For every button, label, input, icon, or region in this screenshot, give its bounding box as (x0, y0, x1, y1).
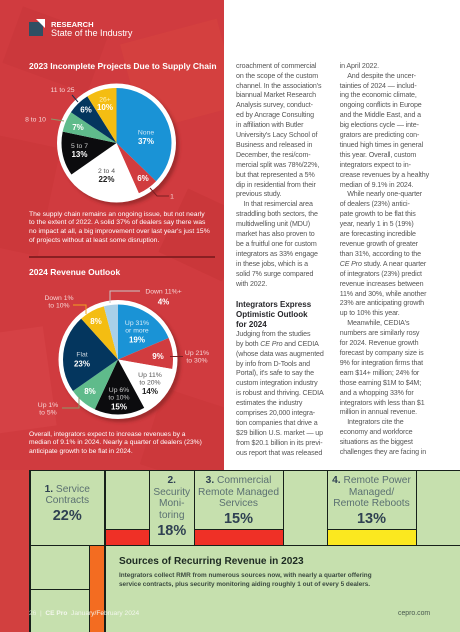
article column 1 bottom: (whose data was augmented (236, 350, 324, 358)
article column 2: crease revenues by a healthy (340, 171, 429, 179)
caption: supply chain: of projects without at least some disruption. (29, 237, 159, 244)
article column 2: and a whopping 33% for (340, 389, 414, 397)
article column 2: in April 2022. (340, 62, 379, 70)
article column 1 top: integrators as 33% engage (236, 250, 318, 258)
heading: revenue outlook: 2024 Revenue Outlook (29, 266, 120, 276)
slice labels: 6% (80, 106, 92, 114)
article column 2: median of 9.1% in 2024. (340, 181, 413, 189)
caption: revenue outlook: anticipate growth to be flat in 2024. (29, 448, 133, 455)
panel heading: Sources of Recurring Revenue in 2023 (119, 556, 304, 566)
article column 2: those earning $1M to $4M; (340, 379, 421, 387)
heading: incomplete projects: 2023 Incomplete Projects Due to Supply Chain (29, 61, 217, 71)
article column 1 bottom: from $20.1 billion in its previ- (236, 439, 322, 447)
article column 2: situations as the biggest (340, 438, 413, 446)
cell: remote power: Remote Reboots (333, 498, 410, 509)
article column 1 top: University's Lacy School of (236, 131, 317, 139)
caption: supply chain: no impact at all, a big improvement over last year's just 15% (29, 228, 210, 235)
pie chart: revenue outlook (38, 288, 209, 422)
article column 1 top: multidwelling unit (MDU) (236, 220, 310, 228)
cell: service contracts: 22% (53, 508, 82, 524)
article column 2: million in annual revenue. (340, 408, 417, 416)
article column 2: pate growth to be flat this (340, 210, 416, 218)
caption: supply chain: The supply chain remains an ongoing issue, but not nearly (29, 210, 205, 218)
caption: revenue outlook (29, 430, 202, 455)
article column 2: of dealers (23%) antici- (340, 200, 410, 208)
caption: supply chain (29, 210, 210, 244)
article column 2: this year. Overall, custom (340, 151, 416, 159)
slice labels: 5 to 7 (71, 143, 88, 150)
folio: 26 | CE Pro January/February 2024 (29, 610, 139, 616)
article column 2: revenue growth of greater (340, 240, 418, 248)
article column 2: year, nearly 1 in 5 (19%) (340, 220, 414, 228)
article column 1 top: market has also proven to (236, 230, 315, 238)
article column 1 top: but that represented a 5% (236, 171, 315, 179)
outer labels (38, 288, 209, 416)
outer labels (25, 87, 174, 200)
article column 2: numbers are similarly rosy (340, 329, 419, 337)
outer labels: to 5% (39, 410, 57, 416)
article column 1 top (236, 62, 322, 288)
article column 2: Meanwhile, CEDIA's (347, 319, 409, 327)
article column 2: Integrators cite the (347, 418, 404, 426)
slice labels: 19% (129, 336, 145, 344)
outer labels: 11 to 25 (50, 87, 75, 94)
slice labels: None (138, 130, 154, 136)
article column 1 top: Analysis survey, conduct- (236, 101, 313, 109)
caption: revenue outlook: median of 9.1% in 2024. Nearly a quarter of dealers (23%) (29, 439, 202, 446)
leader lines (51, 95, 169, 196)
article column 2: CE Pro study. A near quarter (340, 260, 426, 268)
article column 2: tinued high times in general (340, 141, 423, 149)
slice labels: 23% (74, 360, 90, 368)
cell: lower left bottom (30, 590, 88, 632)
cell: remote managed services: Remote Managed (198, 486, 279, 498)
cell: remote managed services: 3. Commercial (206, 475, 271, 486)
cell: remote power: Managed/ (349, 486, 394, 498)
article column 1 bottom: comprises 20,000 integra- (236, 409, 315, 417)
cell: security monitoring (150, 471, 194, 544)
article column 1 bottom: custom integration industry (236, 379, 318, 387)
outer labels: Down 1% (44, 295, 74, 302)
article column 2: 23% are anticipating growth (340, 299, 424, 307)
article column 2: revenue increases between (340, 280, 423, 288)
red background panel (0, 0, 224, 470)
cell: remote power (328, 471, 416, 528)
article column 2: challenges they are facing in (340, 448, 426, 456)
article column 2: economy and workforce (340, 428, 412, 436)
cell: empty (284, 471, 326, 544)
slice labels (74, 317, 164, 412)
article column 2: And despite the uncer- (347, 72, 416, 80)
cell: service contracts: 1. Service (45, 484, 90, 494)
cell: lower left top (30, 546, 88, 589)
outer labels: 8 to 10 (25, 116, 46, 124)
panel body text: service contracts, plus security monitoring aiding roughly 1 out of every 5 dealers. (119, 581, 370, 588)
article column 2: up to 10% this year. (340, 309, 400, 317)
article column 2: for 2024. Revenue growth (340, 339, 418, 347)
outer labels: 4% (158, 298, 169, 306)
article column 2: earn $14+ million; 24% for (340, 369, 419, 377)
article column 1 bottom: ous report that was released (236, 449, 322, 457)
outer labels: to 30% (186, 358, 208, 364)
slice labels: Flat (76, 352, 88, 358)
slice labels: Up 31% (125, 320, 149, 327)
slice labels (71, 96, 154, 184)
article column 1 bottom: by both CE Pro and CEDIA (236, 340, 319, 348)
article column 2: than 31%, according to the (340, 250, 421, 258)
outer labels: Up 21% (185, 350, 209, 357)
cell: remote power: 13% (357, 510, 386, 526)
article column 1 bottom: estimates the industry (236, 399, 302, 407)
slice labels: 14% (142, 387, 158, 396)
article column 2: tainties of 2024 — includ- (340, 82, 417, 90)
slice labels: to 20% (139, 380, 161, 386)
article column 1 top: be a fruitful one for custom (236, 240, 317, 248)
slice labels: 8% (90, 317, 102, 326)
article subheading (236, 300, 311, 329)
article column 1 bottom: $29 billion U.S. market — up (236, 429, 323, 437)
caption: revenue outlook: Overall, integrators expect to increase revenues by a (29, 430, 186, 438)
cell: remote managed services (194, 471, 282, 528)
article column 2: integrators with less than $1 (340, 398, 425, 406)
article column 1 top: Business and released in (236, 141, 312, 149)
article column 2: forecast by company size is (340, 349, 424, 357)
article column 2: 11% and 30%, while another (340, 290, 426, 298)
article column 2: integrators expect to in- (340, 161, 411, 169)
treemap grid background (29, 470, 460, 632)
article column 1 bottom (236, 330, 324, 457)
article column 1 top: in affiliation with Butler (236, 121, 303, 129)
cell: service contracts (30, 471, 104, 544)
slice labels: 13% (71, 150, 88, 159)
article column 2: big elections cycle — inte- (340, 121, 419, 129)
article column 2: grators are predicting con- (340, 131, 419, 139)
article column 1 top: straddling both sectors, the (236, 210, 318, 218)
article column 1 top: dip in residential from their (236, 181, 316, 189)
slice labels: 8% (84, 387, 96, 396)
yellow bar (328, 530, 416, 544)
article column 2: and the Middle East, and a (340, 111, 421, 119)
section label: research logo and text (29, 19, 132, 38)
article column 1 top: croachment of commercial (236, 62, 316, 70)
cell: remote managed services: 15% (224, 510, 253, 526)
article column 2: are forecasting incredible (340, 230, 416, 238)
slice labels: 10% (97, 103, 113, 112)
article column 2: While nearly one-quarter (347, 190, 422, 198)
article subheading: Optimistic Outlook (236, 310, 308, 319)
outer labels: 1 (170, 194, 174, 200)
section label: research logo and text: RESEARCH (51, 20, 94, 29)
cell: empty with red bar (106, 471, 148, 528)
article column 1 top: channel. In the association's (236, 82, 321, 90)
slice labels: 2 to 4 (98, 168, 115, 175)
slice labels: 15% (111, 402, 127, 412)
section label: research logo and text: State of the Industry (51, 28, 132, 38)
red bar 1 (106, 530, 148, 544)
cell: empty right (416, 471, 460, 544)
pie chart: incomplete projects (25, 84, 179, 206)
cell: security monitoring: 18% (157, 522, 186, 538)
slice labels: Up 6% (109, 387, 129, 394)
panel body text (119, 572, 372, 588)
cell: security monitoring: toring (159, 510, 184, 520)
divider (29, 256, 215, 258)
article column 1 top: ed by Ancrage Consulting (236, 111, 314, 119)
article column 2: 9% for integration firms that (340, 359, 423, 367)
outer labels: Up 1% (38, 402, 58, 409)
slice labels: 22% (98, 175, 115, 184)
article column 2 (340, 62, 430, 456)
cell: service contracts: Contracts (45, 495, 89, 506)
caption: supply chain: to the extent of 2022. A solid 37% of dealers say there was (29, 219, 205, 226)
cell: security monitoring: 2. (168, 475, 176, 486)
panel body text: Integrators collect RMR from numerous sources now, with nearly a quarter offering (119, 572, 372, 579)
cell: remote managed services: Services (219, 498, 258, 509)
article column 1 bottom: Portal), it's safe to say the (236, 369, 314, 377)
article column 1 top: In that resimercial area (244, 200, 313, 208)
article column 1 top: mercial split was 78%/22%, (236, 161, 319, 169)
article column 2: of integrators (23%) predict (340, 270, 422, 278)
panel: sources of recurring revenue (106, 546, 460, 632)
article column 1 bottom: by info from D-Tools and (236, 360, 310, 368)
slice labels: 9% (152, 352, 164, 361)
leader lines (62, 291, 183, 408)
slice labels: to 10% (108, 394, 130, 402)
article column 1 top: with 2022. (236, 280, 267, 288)
article column 1 top: solid 7% surge compared (236, 270, 313, 278)
slice labels: 37% (138, 137, 154, 146)
red bar 2 (194, 530, 282, 544)
website: cepro.com (398, 610, 430, 616)
slice labels: 7% (72, 123, 84, 132)
article subheading: for 2024 (236, 320, 267, 329)
article column 1 top: on the scope of the custom (236, 72, 318, 80)
outer labels: to 10% (48, 302, 70, 310)
article column 1 bottom: is robust and thriving. CEDIA (236, 389, 324, 397)
article column 1 top: previous study. (236, 190, 281, 198)
article column 1 top: in these jobs, which is a (236, 260, 308, 268)
cell: security monitoring: Security (153, 486, 190, 498)
article column 1 bottom: tion companies that drive a (236, 419, 318, 427)
slice labels: 26+ (99, 96, 111, 104)
article column 2: ing the economic climate, (340, 91, 417, 99)
slice labels: or more (125, 328, 149, 334)
cell: security monitoring: Moni- (159, 498, 184, 509)
slice labels: Up 11% (138, 372, 162, 379)
article column 1 top: December, the resi/com- (236, 151, 311, 159)
article column 1 top: biannual Market Research (236, 91, 316, 99)
red strip beside bottom grid (0, 470, 29, 632)
cell: remote power: 4. Remote Power (332, 475, 411, 486)
orange bar (90, 546, 104, 632)
article column 2: ongoing conflicts in Europe (340, 101, 422, 109)
outer labels: Down 11%+ (145, 288, 182, 296)
slice labels: 6% (137, 174, 149, 183)
article column 1 bottom: Judging from the studies (236, 330, 310, 338)
article subheading: Integrators Express (236, 300, 311, 309)
